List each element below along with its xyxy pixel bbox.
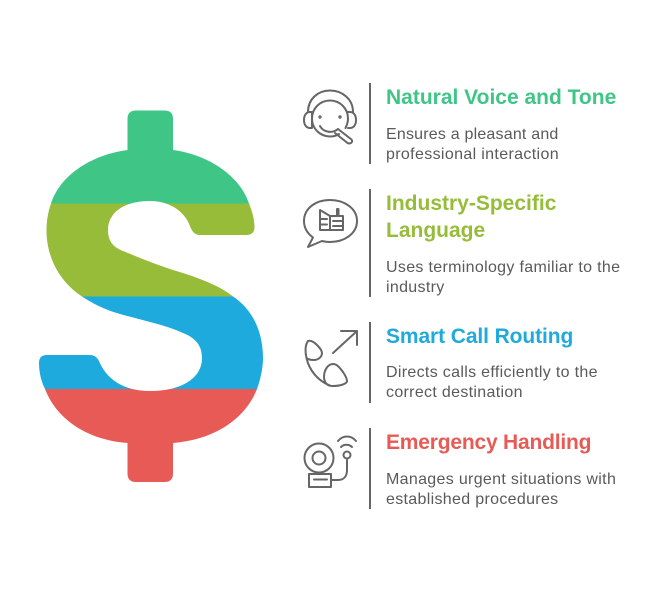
dollar sign graphic: [39, 110, 263, 482]
text: language description: [386, 259, 620, 296]
dollar band: green: [51, 110, 249, 204]
icon: phone handset with arrow: [306, 331, 357, 386]
item divider: voice: [369, 83, 371, 164]
dollar band: red: [45, 389, 257, 482]
icon: alarm bell: [304, 436, 356, 487]
heading: Industry-Specific Language: Industry-Specific: [386, 192, 556, 215]
heading: Industry-Specific Language: [386, 192, 556, 242]
heading: Industry-Specific Language: Language: [386, 218, 485, 242]
heading: Emergency Handling: Emergency Handling: [386, 431, 591, 454]
heading: Smart Call Routing: Smart Call Routing: [386, 325, 573, 348]
text: routing description: Directs calls efficiently to the: [386, 364, 598, 381]
text: routing description: correct destination: [386, 384, 523, 401]
text: language description: industry: [386, 279, 445, 296]
text: voice description: professional interaction: [386, 146, 559, 163]
heading: Natural Voice and Tone: Natural Voice and Tone: [386, 86, 616, 109]
icon: speech bubble with book: [304, 200, 357, 247]
text: emergency description: Manages urgent situations with: [386, 471, 616, 488]
text: language description: Uses terminology familiar to the: [386, 259, 620, 276]
text: emergency description: [386, 471, 616, 508]
text: voice description: [386, 126, 559, 163]
item divider: language: [369, 189, 371, 297]
item divider: routing: [369, 322, 371, 403]
text: emergency description: established procedures: [386, 491, 558, 508]
text: routing description: [386, 364, 598, 401]
text: voice description: Ensures a pleasant and: [386, 126, 559, 143]
item divider: emergency: [369, 428, 371, 509]
dollar band: blue: [39, 296, 263, 389]
icon: headset agent face: [304, 90, 356, 144]
dollar band: olive: [46, 204, 254, 296]
